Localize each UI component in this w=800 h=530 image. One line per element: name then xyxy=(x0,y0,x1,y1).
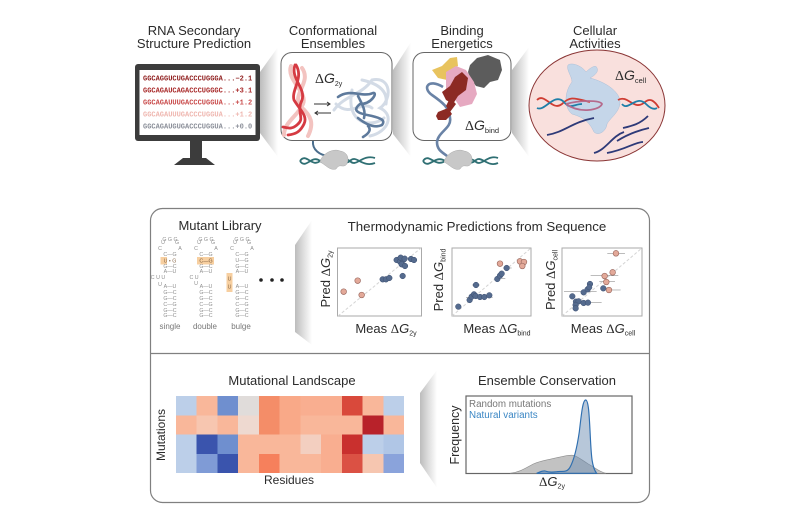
icon: mRNA strands xyxy=(547,116,649,153)
labels: hairpin types: double xyxy=(193,322,218,331)
label: delta G bind xyxy=(465,117,499,135)
icon: mutant hairpins: U xyxy=(161,240,165,246)
icon: yellow protein xyxy=(432,57,458,80)
axis label: Meas delta G cell: Meas ΔG xyxy=(571,321,625,336)
icon: mutant hairpins: G—C xyxy=(163,296,177,302)
icon: mutant hairpins: G xyxy=(211,240,215,246)
axis label: Meas delta G cell: cell xyxy=(625,330,636,338)
axis label: Meas delta G 2y: 2y xyxy=(409,330,417,338)
heading: RNA Secondary Structure Prediction xyxy=(137,23,251,51)
chart: density distributions xyxy=(466,396,632,474)
icon: computer monitor with sequences xyxy=(135,64,260,165)
icon: mutant hairpins: A—U xyxy=(164,269,177,275)
icon: mutant hairpins: G—C xyxy=(199,308,213,314)
icon: mutant hairpins: G—C xyxy=(235,296,249,302)
icon: mutant hairpins: C—G xyxy=(199,302,213,308)
label: delta G cell: ΔG xyxy=(615,67,635,84)
icon: mutant hairpins: C xyxy=(230,246,234,252)
arrow: ensemble conservation to landscape xyxy=(420,370,437,488)
axis label: Meas delta G bind: bind xyxy=(517,330,531,338)
icon: computer monitor with sequences: GGCAGAUUUGACCCUGGUA...+1.2 xyxy=(143,112,252,120)
icon: mutant hairpins: G—C xyxy=(163,313,177,319)
label: delta G 2y: ΔG xyxy=(315,70,335,87)
icon: mutant hairpins: U xyxy=(158,282,162,288)
heading: Mutant Library: Mutant Library xyxy=(178,218,262,233)
icon: mutant hairpins: A xyxy=(214,246,218,252)
icon: mutant hairpins: G xyxy=(175,240,179,246)
axis label: delta G 2y: 2y xyxy=(558,484,565,490)
icon: computer monitor with sequences: GGCAGAUGUGACCCUGGUA...+0.0 xyxy=(143,124,252,132)
arrow: monitor to conformational ensembles xyxy=(260,47,278,157)
axis label: Meas delta G 2y: Meas ΔG xyxy=(355,321,409,336)
axis label: Pred delta G cell: Pred ΔG xyxy=(543,260,558,310)
label: delta G cell: cell xyxy=(635,76,646,85)
axis label: Residues: Residues xyxy=(264,473,314,487)
icon: mutant hairpins: G—C xyxy=(235,313,249,319)
icon: mutant hairpins: G G G xyxy=(162,237,178,243)
icon: mutant hairpins: U xyxy=(197,240,201,246)
icon: mutant hairpins: C—G xyxy=(199,258,213,264)
label: delta G 2y xyxy=(315,70,343,88)
icon: ribosome xyxy=(566,64,620,134)
label: delta G cell xyxy=(615,67,646,85)
icon: mutant hairpins xyxy=(151,237,254,319)
axis label: Pred delta G 2y: Pred ΔG xyxy=(318,258,333,307)
icon: RNA strand with dark red protein xyxy=(427,72,468,156)
heading: Ensemble Conservation: Ensemble Conservation xyxy=(478,373,616,388)
heading: Conformational Ensembles xyxy=(289,23,377,51)
icon: mutant hairpins: C—G xyxy=(235,302,249,308)
icon: mutant hairpins: A xyxy=(250,246,254,252)
icon: mutant hairpins: G—C xyxy=(163,308,177,314)
icon: mutant hairpins: G—C xyxy=(199,290,213,296)
heading: Mutational Landscape: Mutational Landscape xyxy=(228,373,356,388)
panel: predictions frame xyxy=(150,208,650,502)
icon: computer monitor with sequences: GGCAGAUUUGACCCUGGUA...+1.2 xyxy=(143,100,252,108)
chart: scatter delta G bind xyxy=(452,248,531,316)
heading: Conformational Ensembles: Conformational xyxy=(289,23,377,38)
icon: mutant hairpins: C U xyxy=(189,275,199,281)
chart: scatter delta G cell xyxy=(562,248,642,316)
heading: Cellular Activities: Activities xyxy=(569,36,621,51)
labels: hairpin types: single xyxy=(160,322,181,331)
icon: mutant hairpins: C—G xyxy=(235,252,249,258)
icon: mutant hairpins: U xyxy=(194,281,198,287)
arrow: ensembles to binding xyxy=(393,42,411,157)
icon: mutant hairpins: A—U xyxy=(164,284,177,290)
heading: Binding Energetics xyxy=(431,23,493,51)
icon: computer monitor with sequences: GGCAGGUCUGACCCUGGGA...−2.1 xyxy=(143,76,252,84)
legend: Random mutations: Random mutations xyxy=(469,399,551,410)
heading: Conformational Ensembles: Ensembles xyxy=(301,36,366,51)
icon: stem, DNA and polymerase xyxy=(300,141,375,169)
icon: DNA and polymerase xyxy=(423,150,498,169)
axis label: Pred delta G bind: bind xyxy=(440,248,448,262)
axis label: Pred delta G bind: Pred ΔG xyxy=(431,262,446,311)
axis label: Mutations: Mutations xyxy=(154,409,168,461)
label: delta G 2y: 2y xyxy=(335,81,343,88)
icon: mutant hairpins: G—C xyxy=(235,264,249,270)
icon: mutant hairpins: G—C xyxy=(199,296,213,302)
icon: dark grey protein xyxy=(468,55,502,88)
icon: mutant hairpins: C xyxy=(194,246,198,252)
labels: hairpin types: bulge xyxy=(231,322,251,331)
arrow: library to predictions xyxy=(295,220,312,345)
legend: Natural variants: Natural variants xyxy=(469,410,538,421)
icon: mutant hairpins: G—C xyxy=(235,290,249,296)
icon: mutant hairpins: C U U xyxy=(151,275,165,281)
icon: computer monitor with sequences: GGCAGAUCAGACCCUGGGC...+3.1 xyxy=(143,88,252,96)
heading: RNA Secondary Structure Prediction: Structure Prediction xyxy=(137,36,251,51)
icon: mutant hairpins: C—G xyxy=(199,252,213,258)
arrows: equilibrium xyxy=(314,102,331,115)
heading: RNA Secondary Structure Prediction: RNA Secondary xyxy=(148,23,241,38)
arrow: binding to cellular xyxy=(512,47,529,157)
labels: hairpin types xyxy=(160,322,251,331)
icon: mutant hairpins: U xyxy=(228,276,232,282)
label: delta G bind: bind xyxy=(485,126,499,135)
axis label: Pred delta G cell: cell xyxy=(552,250,560,260)
icon: mutant hairpins: G—C xyxy=(163,290,177,296)
icon: mutant hairpins: U xyxy=(233,240,237,246)
icon: mutant hairpins: A—U xyxy=(236,269,249,275)
chart: scatter delta G 2y xyxy=(338,248,422,316)
icon: blue unfolded RNA ensemble xyxy=(334,80,388,137)
heading: Thermodynamic Predictions from Sequence: Thermodynamic Predictions from Sequence xyxy=(348,219,606,234)
heading: Cellular Activities xyxy=(569,23,621,51)
icon: mutant hairpins: G—C xyxy=(199,264,213,270)
heading: Binding Energetics: Binding xyxy=(440,23,484,38)
panel: conformational ensembles xyxy=(281,52,392,169)
icon: mutant hairpins: A xyxy=(178,246,182,252)
label: delta G bind: ΔG xyxy=(465,117,485,134)
icon: mutant hairpins: A—U xyxy=(200,269,213,275)
icon: mutant hairpins: C—G xyxy=(163,302,177,308)
heading: Binding Energetics: Energetics xyxy=(431,36,493,51)
icon: mutant hairpins: C xyxy=(158,246,162,252)
axis label: Pred delta G 2y: 2y xyxy=(328,250,334,258)
icon: mutant hairpins: G—C xyxy=(163,264,177,270)
chart: mutation heatmap xyxy=(176,396,404,473)
icon: DNA double helix xyxy=(537,98,659,110)
icon: mutant hairpins: A—U xyxy=(236,284,249,290)
panel: binding energetics xyxy=(413,52,511,169)
heading: Cellular Activities: Cellular xyxy=(573,23,618,38)
icon: mutant hairpins: G G G xyxy=(234,237,250,243)
icon: pink protein xyxy=(446,66,477,107)
panel: cellular activities xyxy=(529,50,665,161)
icon: mutant hairpins: C—G xyxy=(163,252,177,258)
icon: ellipsis xyxy=(259,278,284,282)
axis label: delta G 2y: ΔG xyxy=(539,474,558,489)
icon: mutant hairpins: A—U xyxy=(200,284,213,290)
icon: mutant hairpins: G G G xyxy=(198,237,214,243)
axis label: Meas delta G bind: Meas ΔG xyxy=(463,321,517,336)
icon: mutant hairpins: U—G xyxy=(235,258,249,264)
icon: mutant hairpins: G xyxy=(247,240,251,246)
axis label: Frequency: Frequency xyxy=(448,405,462,465)
icon: mutant hairpins: G—C xyxy=(199,313,213,319)
icon: mutant hairpins: U • G xyxy=(164,258,176,264)
icon: red helix xyxy=(283,65,311,136)
icon: mutant hairpins: G—C xyxy=(235,308,249,314)
icon: mutant hairpins: U xyxy=(228,284,232,290)
